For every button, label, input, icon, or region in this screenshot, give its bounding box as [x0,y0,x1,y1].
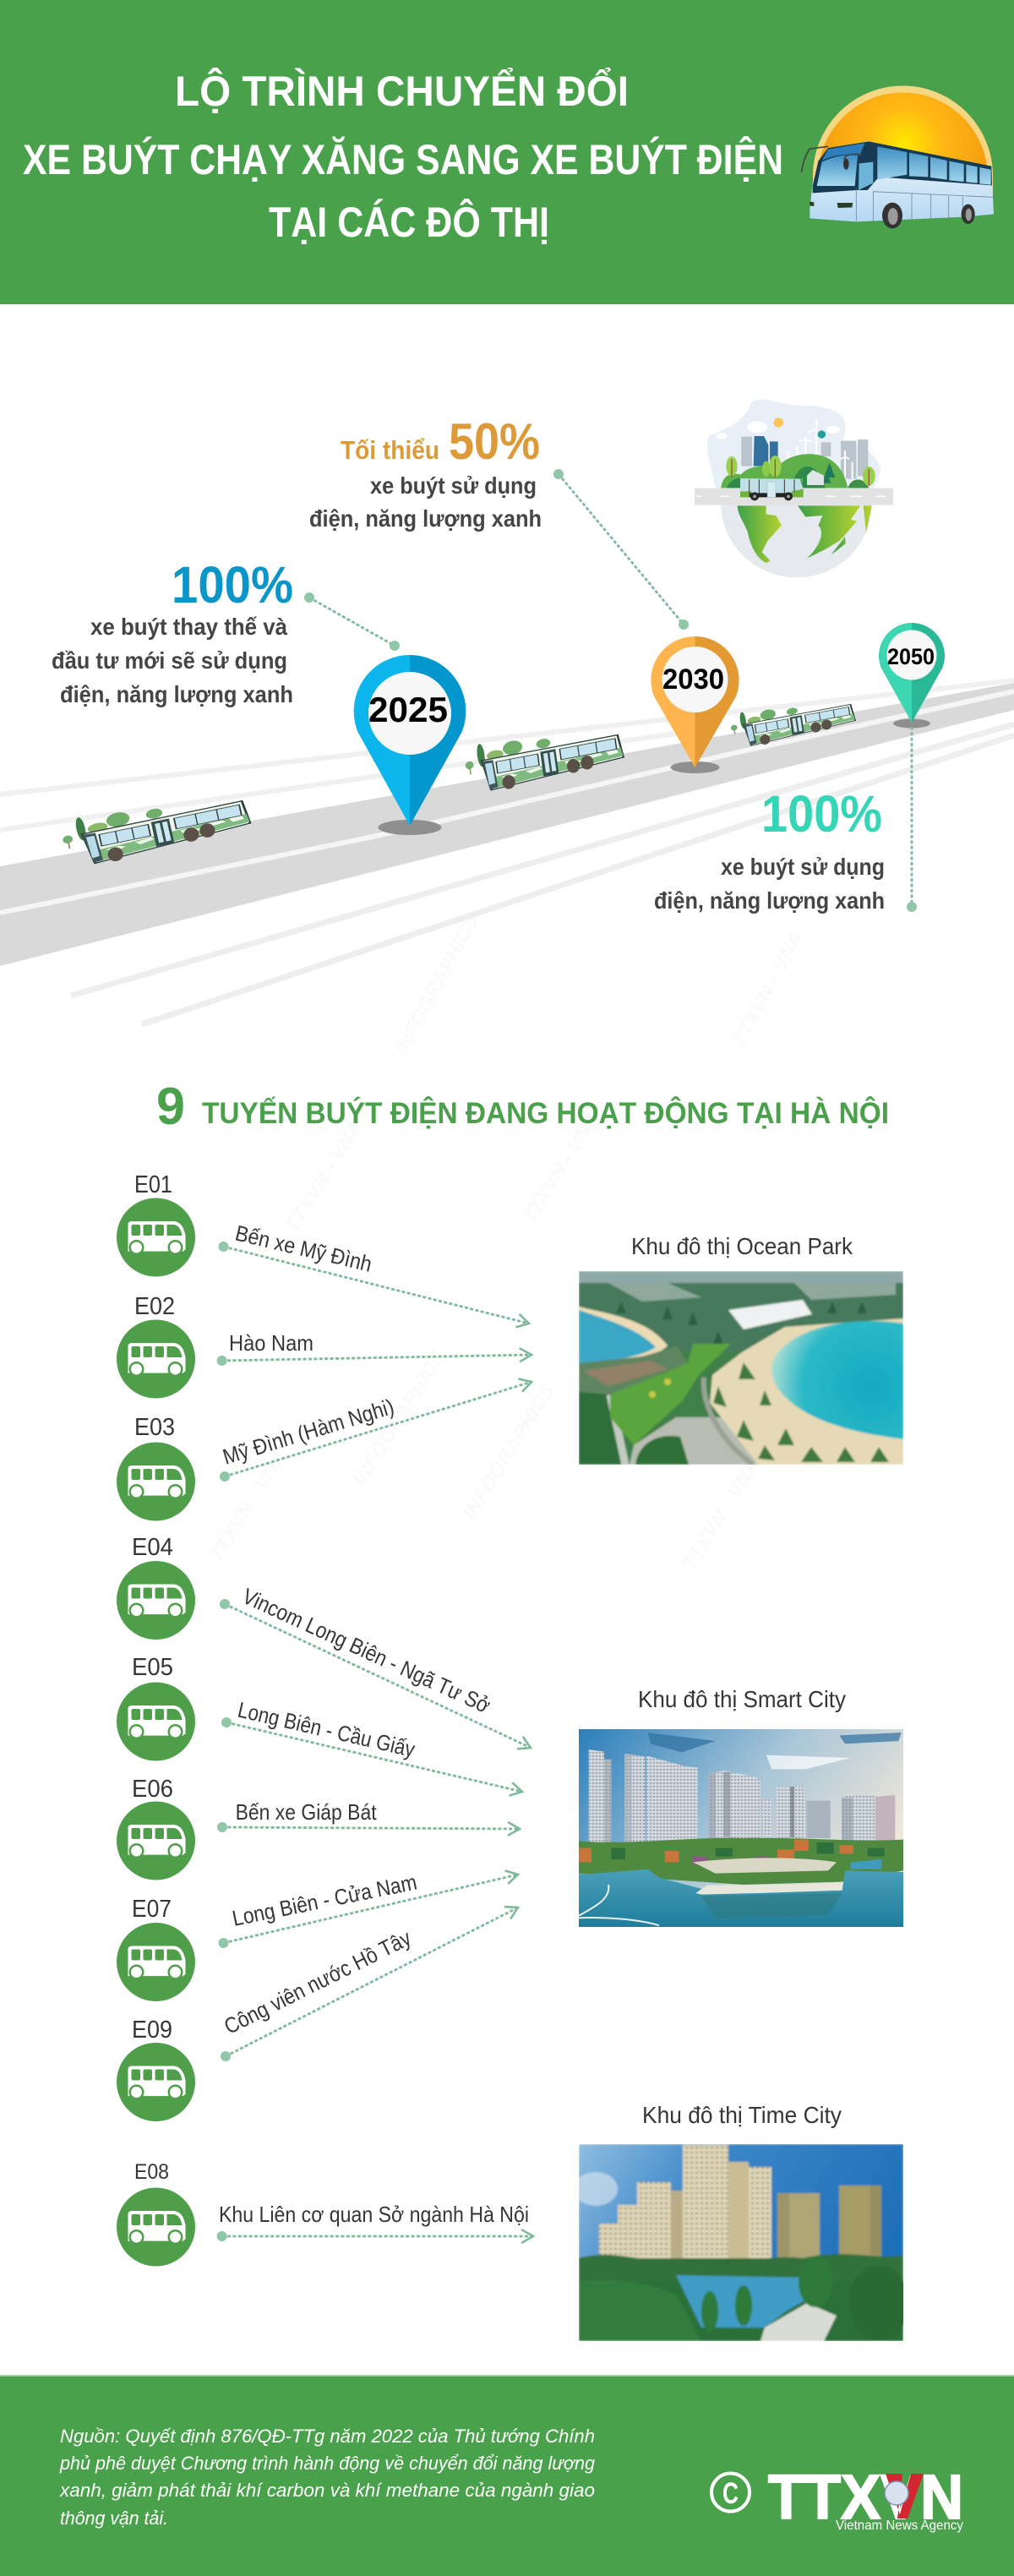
pin 2030: 2030 [662,663,724,696]
callout: 2050 100% [654,785,885,914]
callout: 2030 minimum 50%: xe buýt sử dụng [370,472,537,499]
heading: Smart City: Khu đô thị Smart City [638,1686,846,1712]
route E06: Bến xe Giáp Bát [236,1799,377,1825]
title [23,67,783,246]
route E02: E02 [134,1293,175,1320]
route E05: E05 [132,1654,173,1681]
source note: phủ phê duyệt Chương trình hành động về chuyển đổi năng lượng [59,2453,596,2474]
icon: sun disc [818,92,988,211]
route E06 [117,1776,520,1880]
route E09: E09 [132,2017,172,2044]
footer [0,2375,1014,2576]
background watermarks: TTXVN - VNA [517,1108,604,1228]
route E09: Công viên nước Hồ Tây [220,1925,415,2039]
callout: 2030 minimum 50%: Tối thiểu [341,435,439,465]
pin 2025 [354,655,466,835]
photo: Time City towers [574,2144,909,2341]
route E07: E07 [132,1896,172,1923]
route E03 [117,1382,532,1521]
logo: TTXVN: Vietnam News Agency [836,2519,963,2533]
route E07: Long Biên - Cửa Nam [230,1869,419,1931]
road bus 2 [463,718,624,796]
background watermarks: INFOGRAPHICS [348,1346,450,1490]
source note: thông vận tải. [60,2508,168,2529]
callout: 2050 100%: điện, năng lượng xanh [654,887,885,914]
leader line 2050 [907,727,917,912]
header banner [0,0,1014,304]
photo: Ocean Park aerial [579,1271,903,1465]
background watermarks: TTXVN - VNA [204,1446,292,1566]
source note [59,2426,596,2529]
route E07 [117,1869,518,2001]
title: LỘ TRÌNH CHUYỂN ĐỔI [175,67,629,115]
background watermarks: TTXVN - VNA [678,1454,765,1575]
road buses [58,783,253,870]
source note: Nguồn: Quyết định 876/QĐ-TTg năm 2022 của Thủ tướng Chính [60,2426,595,2447]
route E05 [117,1654,522,1792]
route E02: Hào Nam [229,1330,313,1356]
callout: 2025 100%: 100% [172,556,293,614]
pin 2050 [879,623,945,729]
callout: 2030 minimum 50%: điện, năng lượng xanh [309,505,542,532]
callout: 2050 100%: xe buýt sử dụng [721,854,885,880]
road with lane lines [0,680,1014,1024]
callout: 2030 minimum 50% [309,413,542,532]
route E09 [117,1907,518,2121]
background watermarks [204,911,808,1575]
background watermarks: TTXVN - VNA [281,1116,368,1236]
callout: 2030 minimum 50%: 50% [449,413,540,470]
background watermarks: TTXVN - VNA [728,927,808,1051]
route E04: E04 [132,1534,173,1561]
callout: 2025 100%: xe buýt thay thế và [90,614,287,640]
title: XE BUÝT CHẠY XĂNG SANG XE BUÝT ĐIỆN [23,136,783,183]
logo: TTXVN: C [722,2477,739,2510]
route E02 [117,1293,532,1398]
heading: Time City: Khu đô thị Time City [642,2102,842,2128]
icon: coach bus [801,141,994,228]
callout: 2025 100% [52,556,293,707]
section heading [156,1078,889,1136]
route E01: Bến xe Mỹ Đình [233,1220,374,1277]
route E04 [117,1534,531,1748]
route E05: Long Biên - Cầu Giấy [236,1697,417,1762]
pin 2030 [651,636,739,773]
route E01: E01 [134,1171,172,1198]
callout: 2050 100%: 100% [761,785,882,843]
logo: TTXVN: TTXVN [768,2462,963,2532]
route E01 [117,1171,529,1323]
illustration: green city globe [695,400,893,577]
section heading: TUYẾN BUÝT ĐIỆN ĐANG HOẠT ĐỘNG TẠI HÀ NỘI [202,1096,889,1130]
section heading: 9 [156,1078,185,1136]
route E08 [117,2160,533,2267]
background watermarks: INFOGRAPHICS [458,1380,560,1524]
route E08: E08 [134,2160,169,2184]
source note: xanh, giảm phát thải khí carbon và khí methane của ngành giao [59,2480,595,2501]
road bus 3 [728,692,856,750]
route E03: E03 [134,1414,175,1441]
photo: Smart City towers [579,1729,903,1927]
leader line 2025 [304,592,400,651]
callout: 2025 100%: điện, năng lượng xanh [60,681,293,707]
background watermarks: INFOGRAPHICS [390,911,483,1059]
pin 2050: 2050 [887,644,935,669]
title: TẠI CÁC ĐÔ THỊ [269,198,549,246]
route E08: Khu Liên cơ quan Sở ngành Hà Nội [219,2202,529,2227]
pin 2025: 2025 [368,690,448,729]
leader line 2030 [553,469,689,630]
route E03: Mỹ Đình (Hàm Nghi) [220,1394,397,1470]
icon: sun [813,86,993,211]
route E04: Vincom Long Biên - Ngã Tư Sở [239,1583,494,1718]
route E06: E06 [132,1776,173,1803]
heading: Ocean Park: Khu đô thị Ocean Park [631,1233,853,1259]
callout: 2025 100%: đầu tư mới sẽ sử dụng [52,647,287,674]
